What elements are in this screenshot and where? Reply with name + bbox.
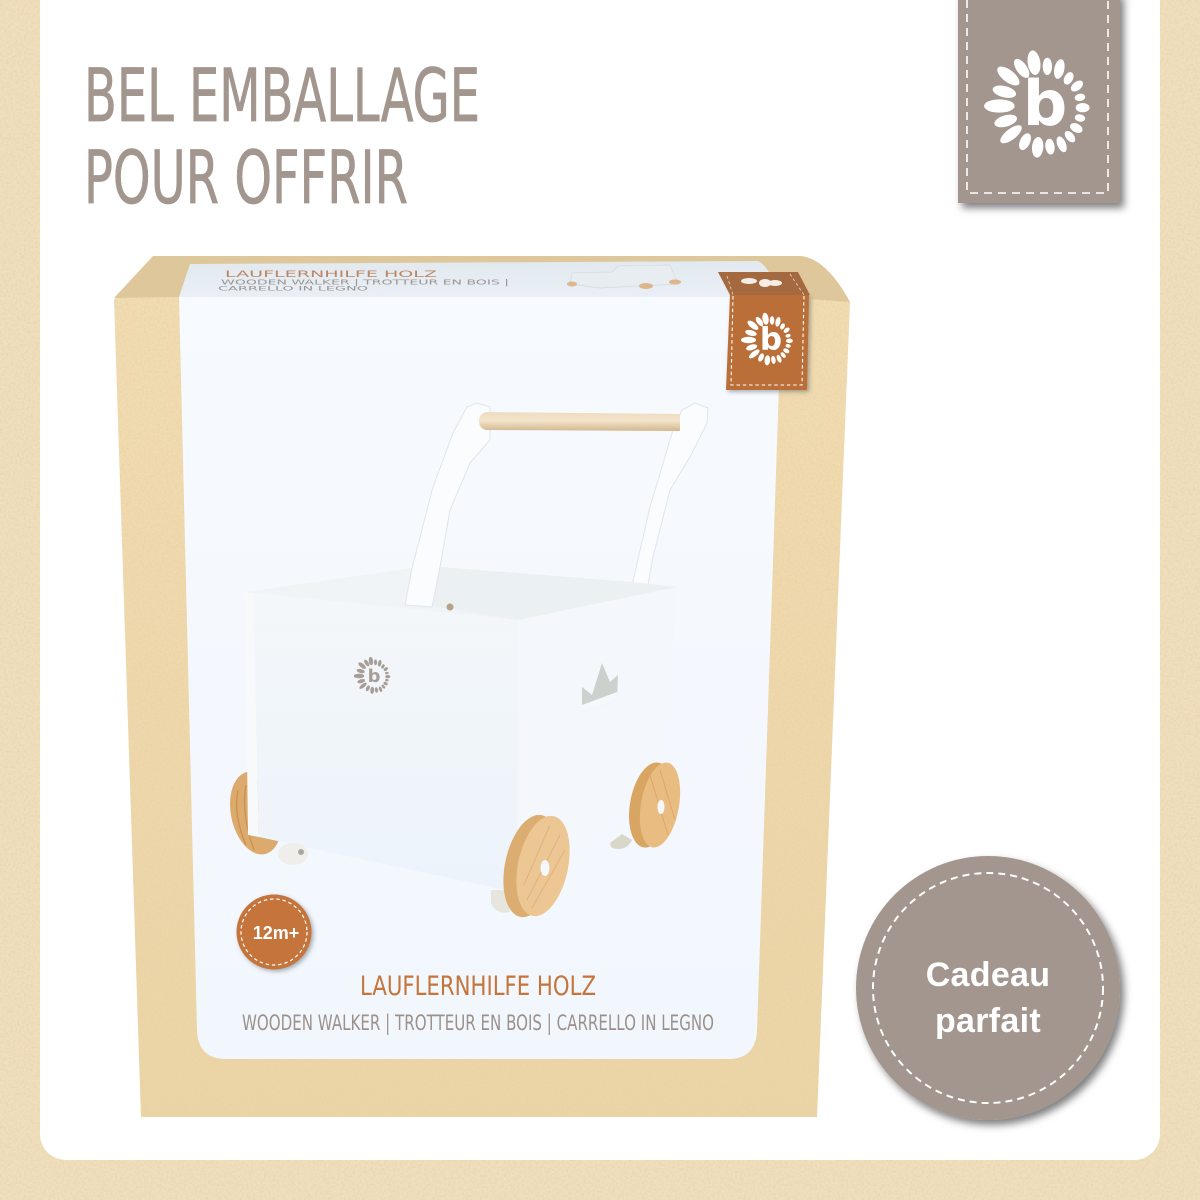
box top face — [114, 256, 850, 302]
icon: brand logo: b — [1023, 67, 1067, 140]
label top text: LAUFLERNHILFE HOLZ — [225, 269, 437, 280]
gift box — [114, 256, 850, 1117]
handle bar — [479, 412, 680, 431]
label subtitle: WOODEN WALKER | TROTTEUR EN BOIS | CARRELLO IN LEGNO — [242, 1011, 714, 1036]
perfect gift badge: parfait — [935, 1002, 1041, 1040]
crown cutout — [582, 663, 618, 712]
age badge: 12m+ — [253, 923, 299, 943]
small logo: b — [368, 666, 381, 687]
front wheel — [495, 810, 578, 922]
back left wheel — [223, 767, 289, 859]
left handle — [405, 403, 490, 607]
icon: tag logo: b — [760, 322, 782, 358]
icon: brand logo — [984, 50, 1090, 158]
perfect gift badge — [856, 856, 1120, 1120]
age badge — [236, 894, 312, 970]
label top text: CARRELLO IN LEGNO — [218, 286, 368, 293]
right wheel — [623, 759, 686, 851]
orange label tag — [718, 272, 810, 390]
box back interior — [245, 568, 677, 620]
label top text — [218, 269, 509, 293]
title: BEL EMBALLAGE — [84, 54, 480, 139]
label top text: WOODEN WALKER | TROTTEUR EN BOIS | — [221, 279, 509, 287]
label top mini walker image — [567, 265, 681, 289]
product label — [179, 261, 810, 1059]
icon: top strip mini logo — [741, 278, 782, 287]
bolt — [446, 604, 454, 610]
perfect gift badge: Cadeau — [926, 956, 1050, 994]
box front face — [253, 593, 518, 895]
casters — [278, 834, 632, 913]
title — [84, 54, 480, 221]
small logo — [354, 657, 390, 694]
box front left edge — [245, 592, 259, 837]
label product title: LAUFLERNHILFE HOLZ — [360, 971, 596, 1002]
box side face — [517, 587, 677, 888]
walker product illustration — [223, 403, 708, 922]
title: POUR OFFRIR — [84, 136, 408, 221]
brand tag — [958, 0, 1120, 203]
right handle — [632, 403, 708, 590]
interior back wall shade — [432, 567, 677, 620]
